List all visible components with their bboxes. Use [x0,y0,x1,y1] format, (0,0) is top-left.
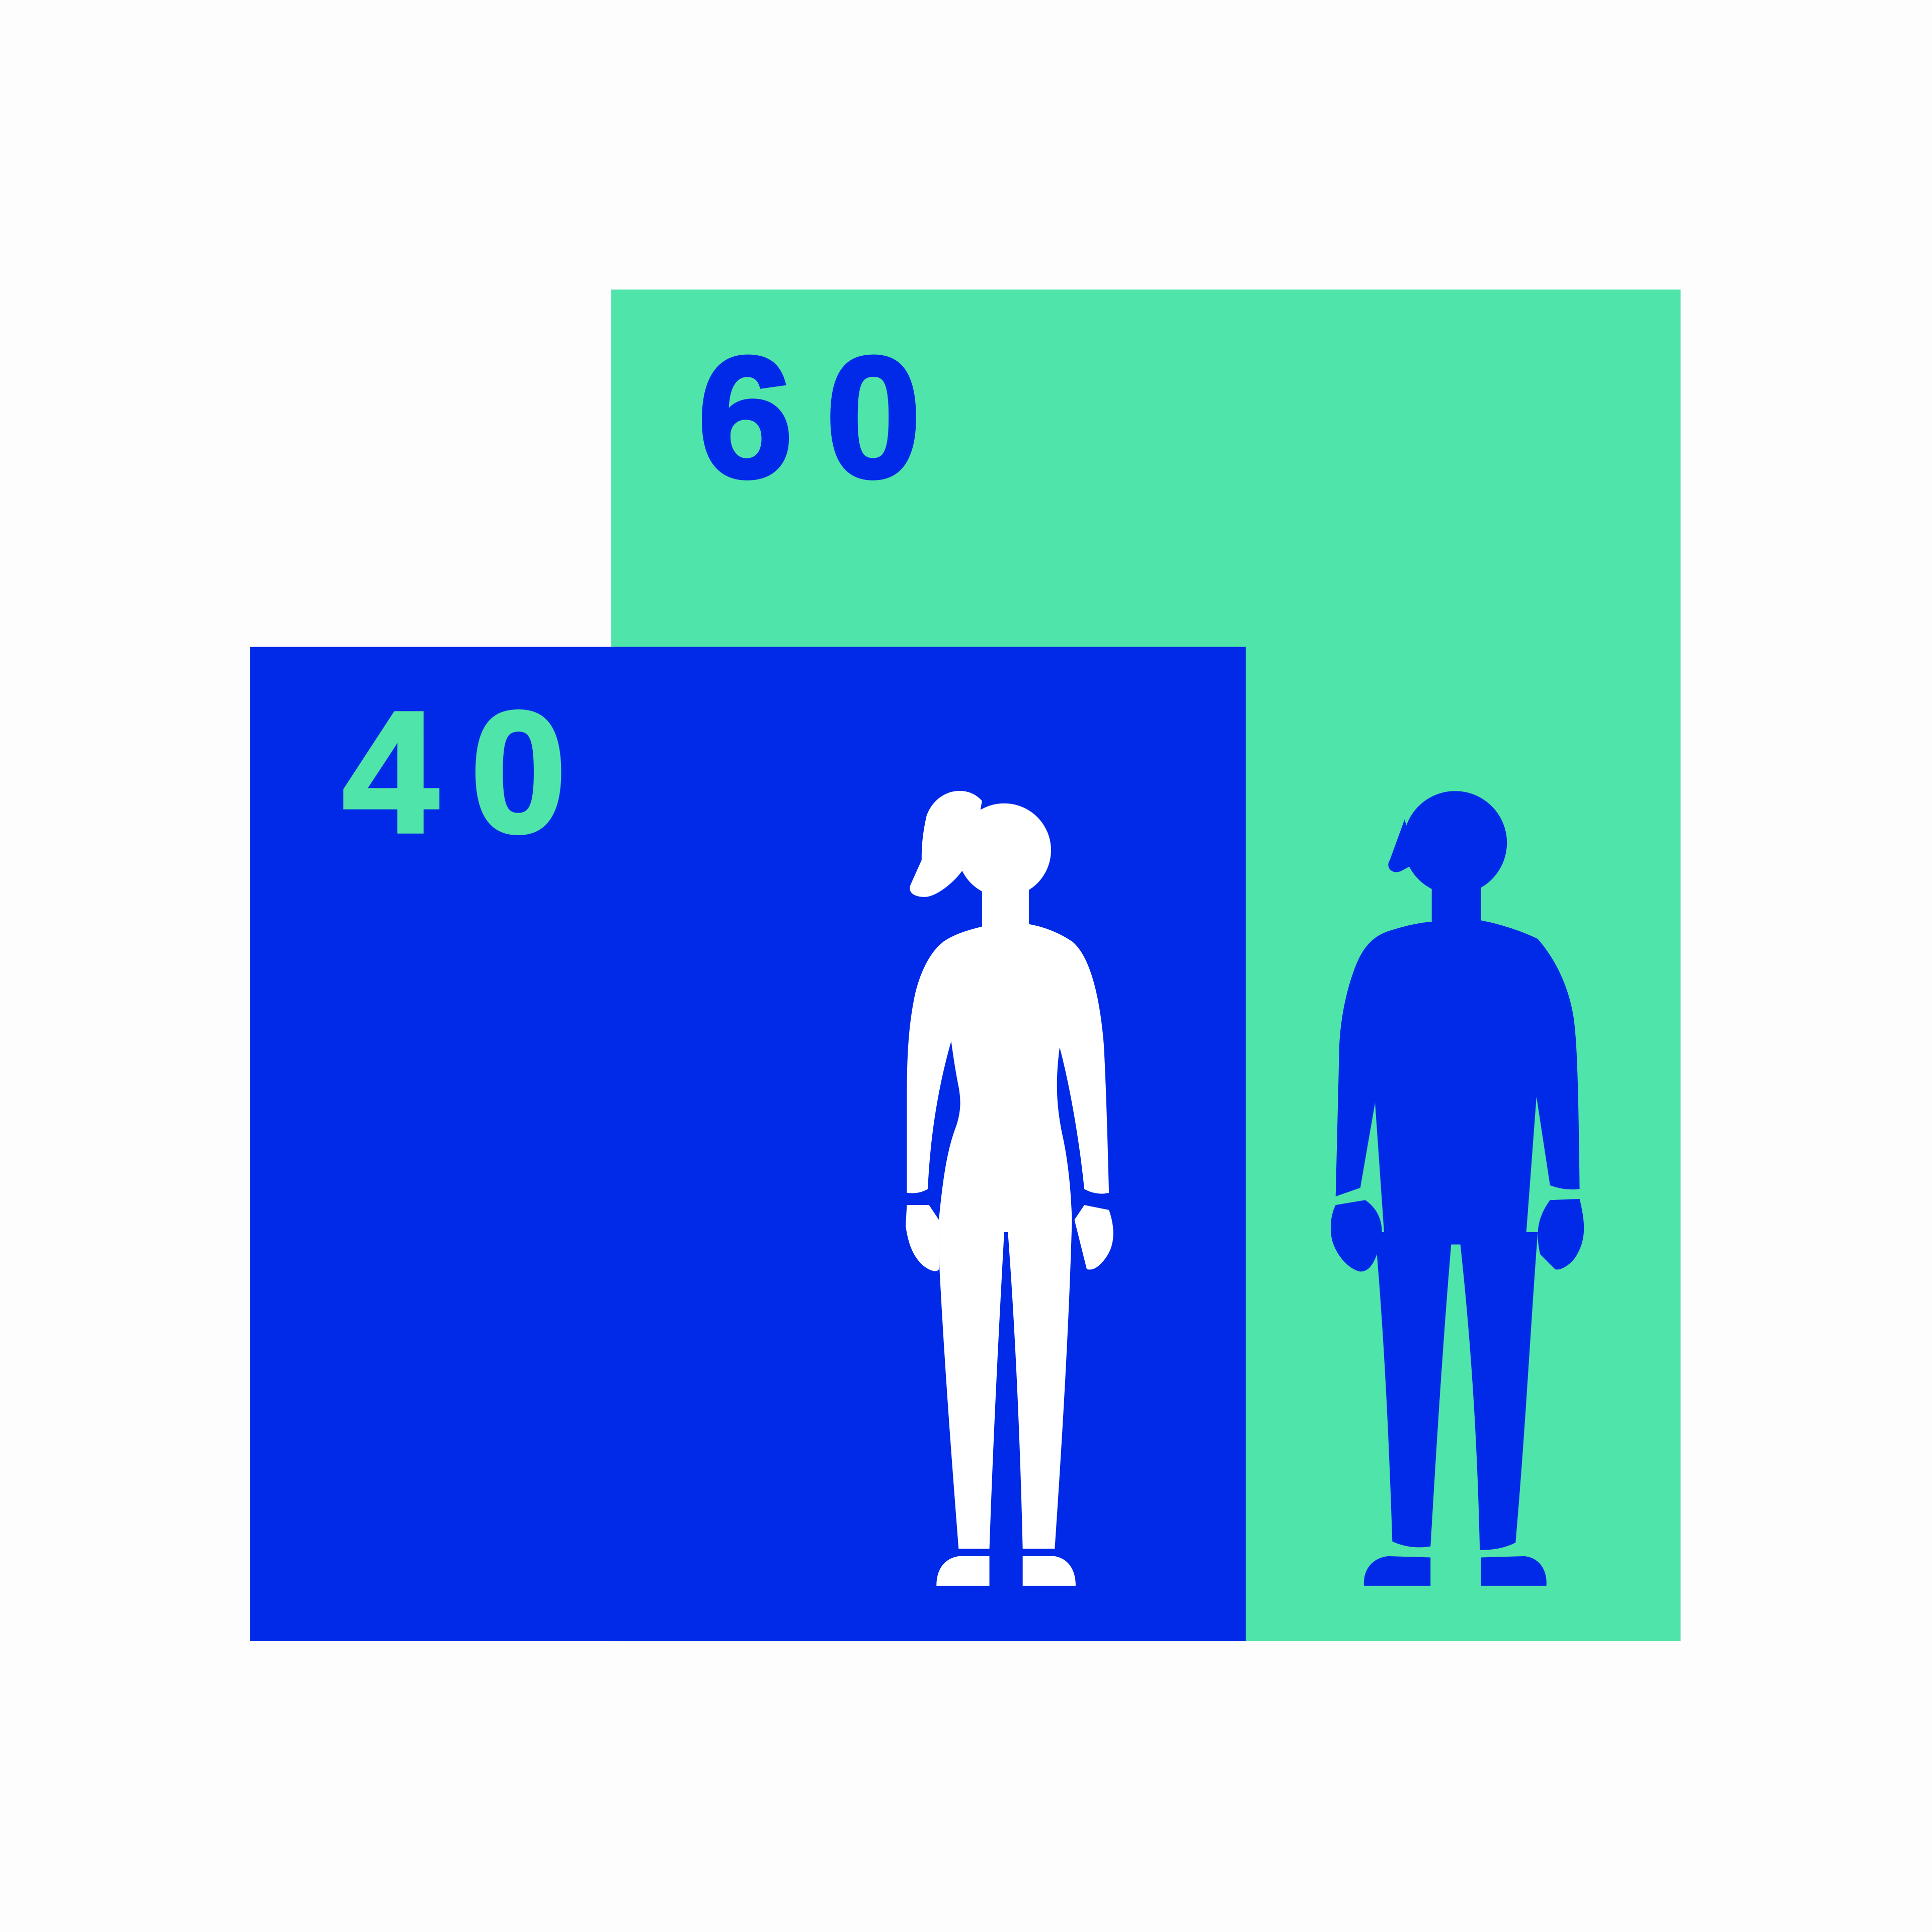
icon: woman silhouette [906,791,1113,1586]
label: 40: 40 [343,676,599,868]
label: 60: 60 [697,321,953,514]
icon: man silhouette [1331,791,1584,1586]
panel: blue 40 [250,647,1246,1641]
